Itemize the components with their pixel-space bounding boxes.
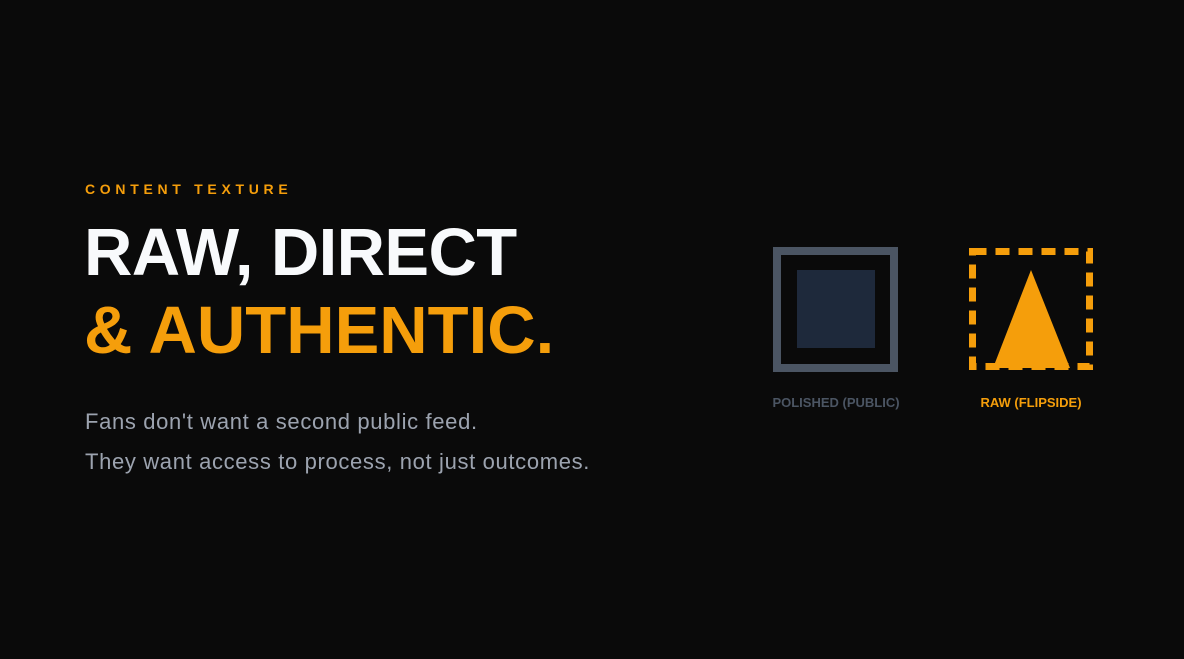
label: raw: RAW (FLIPSIDE)	[980, 395, 1082, 410]
title: & AUTHENTIC.	[84, 293, 554, 368]
title: RAW, DIRECT	[84, 215, 517, 290]
eyebrow label: CONTENT TEXTURE	[85, 181, 292, 197]
icon: raw dashed triangle	[972, 252, 1090, 368]
body text: They want access to process, not just outcomes.	[85, 449, 590, 474]
label: polished: POLISHED (PUBLIC)	[772, 395, 900, 410]
body text: Fans don't want a second public feed.	[85, 409, 478, 434]
body text	[85, 409, 590, 474]
icon: polished square	[772, 247, 1093, 410]
title	[84, 215, 554, 368]
